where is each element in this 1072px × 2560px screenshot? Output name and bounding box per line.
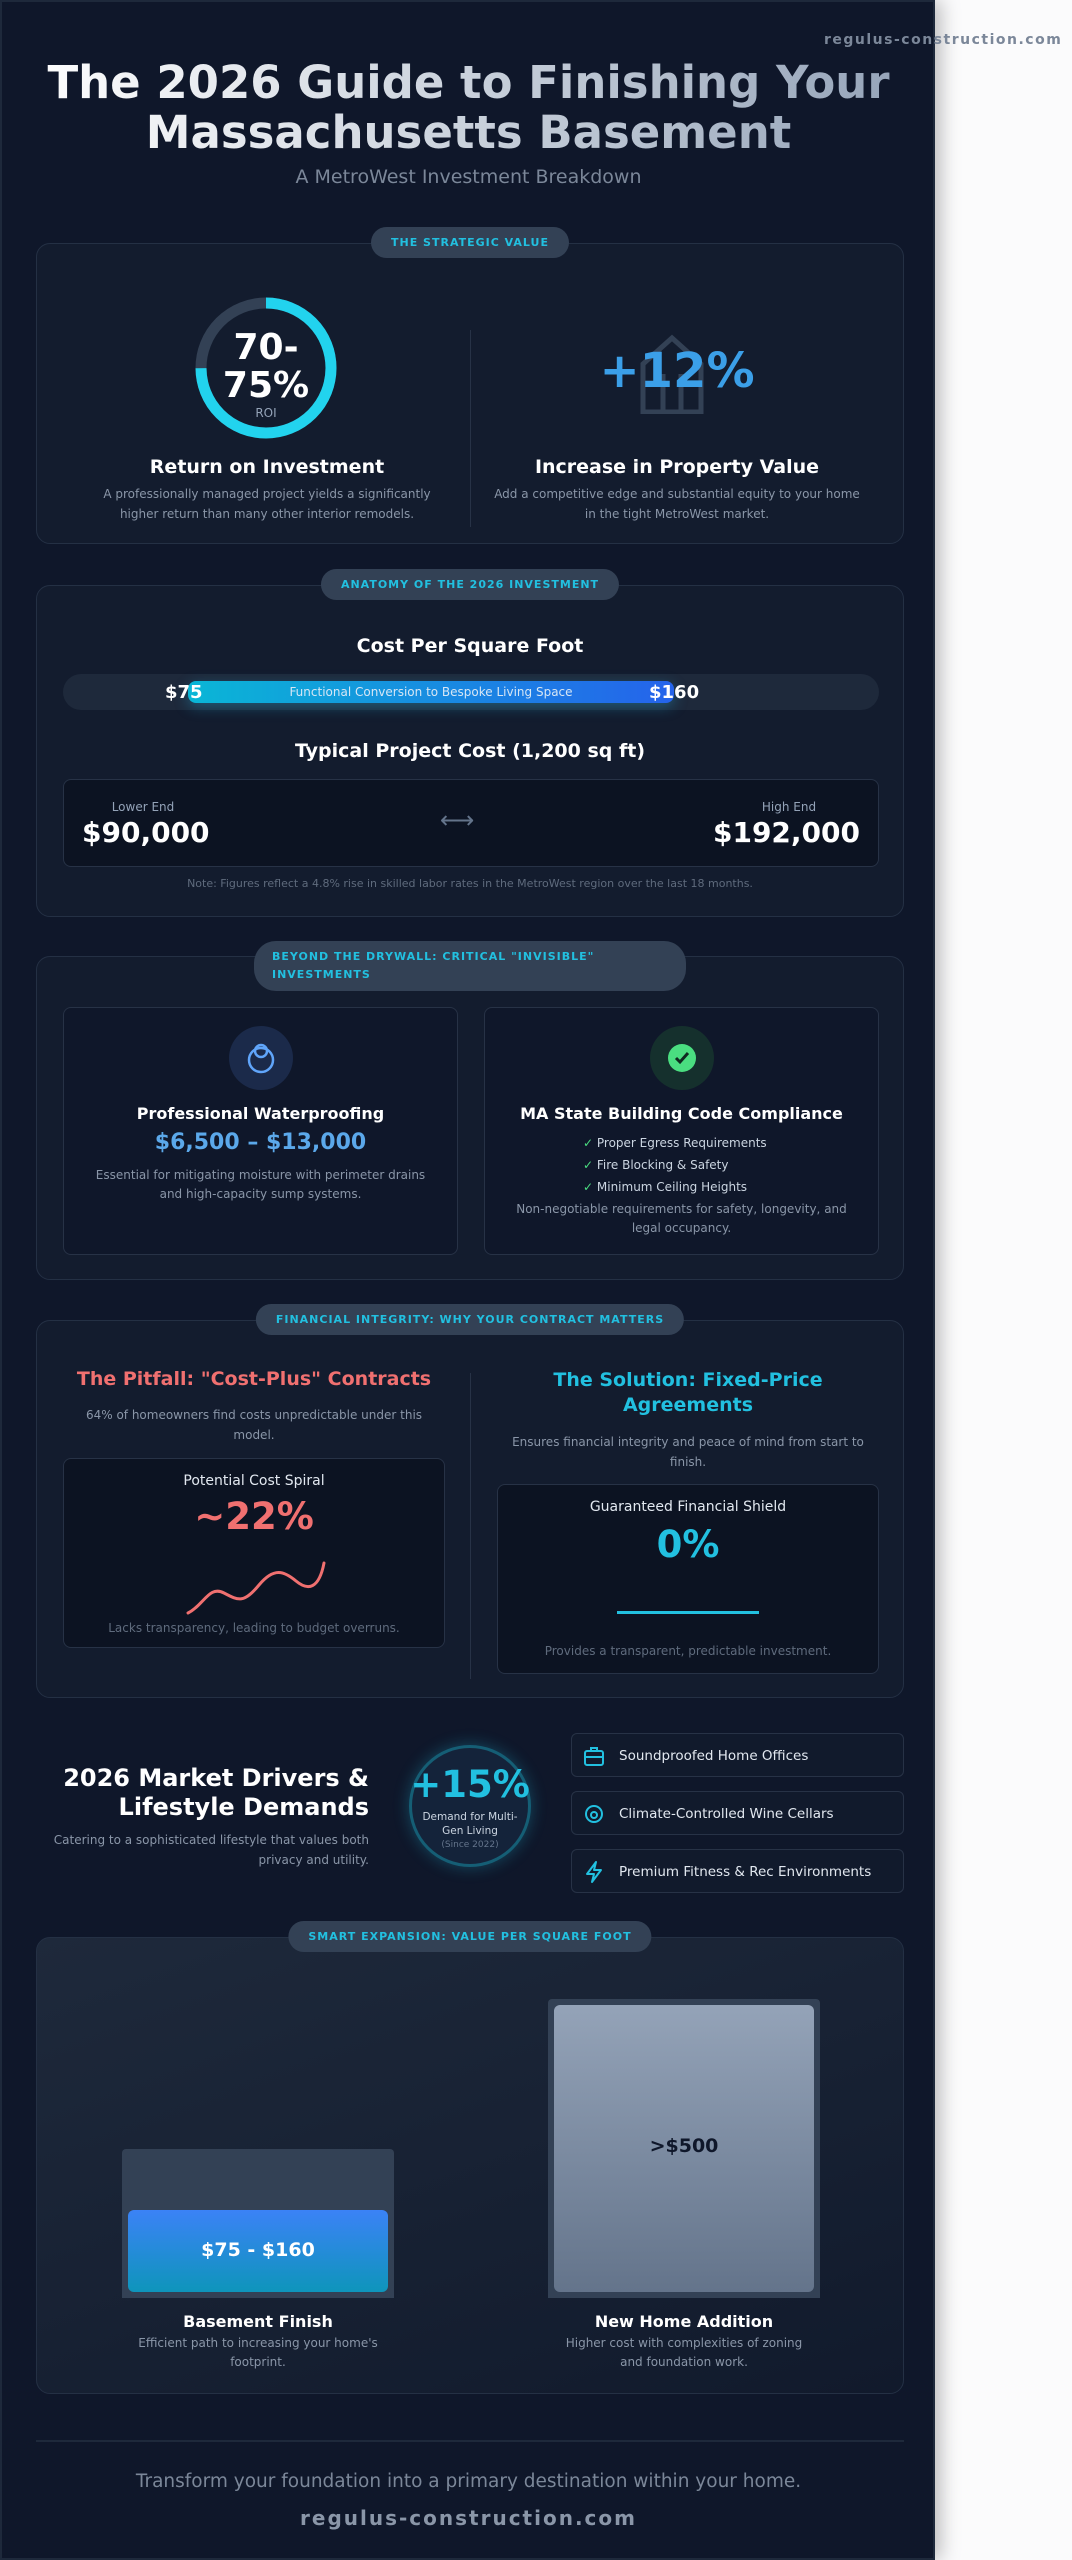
bar: basement finish: $75 - $160 <box>201 2239 315 2261</box>
shield box: 0% <box>657 1523 719 1566</box>
market drivers heading: Catering to a sophisticated lifestyle that values both <box>54 1833 369 1847</box>
pill: anatomy <box>321 569 619 600</box>
range bar: $75 <box>165 682 203 703</box>
card: waterproofing <box>63 1007 458 1255</box>
checklist: ✓ Minimum Ceiling Heights <box>583 1180 747 1194</box>
pill: beyond the drywall: BEYOND THE DRYWALL: CRITICAL "INVISIBLE" INVESTMENTS <box>272 950 594 981</box>
stat: +12% with house icon: +12% <box>599 343 755 399</box>
cost range box: $90,000 <box>82 816 210 849</box>
text: property value: in the tight MetroWest market. <box>585 507 769 521</box>
text: property value: Increase in Property Value <box>535 456 819 478</box>
card: code compliance: MA State Building Code Compliance <box>520 1104 843 1123</box>
pill: financial integrity: FINANCIAL INTEGRITY: WHY YOUR CONTRACT MATTERS <box>276 1313 664 1326</box>
card: code compliance: legal occupancy. <box>632 1221 731 1235</box>
stat circle: +15%: (Since 2022) <box>441 1840 499 1850</box>
item: home offices: Soundproofed Home Offices <box>619 1748 808 1764</box>
card: code compliance: Non-negotiable requirements for safety, longevity, and <box>516 1202 847 1216</box>
left: pitfall: 64% of homeowners find costs unpredictable under this <box>86 1408 422 1422</box>
stat circle: +15%: Demand for Multi- <box>422 1811 518 1823</box>
text: property value: Add a competitive edge and substantial equity to your home <box>494 487 860 501</box>
bar: new home addition <box>548 1999 820 2298</box>
label: new home addition: New Home Addition <box>595 2312 773 2331</box>
market drivers heading: privacy and utility. <box>259 1853 369 1867</box>
label: new home addition: and foundation work. <box>620 2355 748 2369</box>
left: pitfall <box>76 1368 431 1442</box>
cost range box: $192,000 <box>713 816 860 849</box>
shield box <box>497 1484 879 1674</box>
label: basement finish: footprint. <box>230 2355 286 2369</box>
pill: anatomy: ANATOMY OF THE 2026 INVESTMENT <box>341 578 599 591</box>
label: basement finish <box>138 2312 378 2369</box>
right: solution <box>512 1369 864 1469</box>
card: waterproofing: Essential for mitigating moisture with perimeter drains <box>96 1168 425 1182</box>
donut chart: ROI: 75% <box>223 365 309 406</box>
left: pitfall: The Pitfall: "Cost-Plus" Contracts <box>77 1368 431 1390</box>
right: solution: The Solution: Fixed-Price <box>553 1369 823 1391</box>
bar: basement finish <box>122 2149 394 2298</box>
subtitle: A MetroWest Investment Breakdown <box>295 166 642 188</box>
pill: strategic value <box>371 227 569 258</box>
icon: check <box>650 1026 714 1090</box>
item: home offices <box>571 1733 904 1777</box>
donut chart: ROI: 70- <box>233 327 299 368</box>
cost range box: High End <box>762 800 816 814</box>
stat circle: +15%: +15% <box>410 1763 530 1806</box>
card: waterproofing: $6,500 – $13,000 <box>155 1130 366 1155</box>
checklist: ✓ Proper Egress Requirements <box>583 1136 767 1150</box>
item: fitness: Premium Fitness & Rec Environments <box>619 1864 871 1880</box>
title: Massachusetts Basement <box>146 106 791 159</box>
label: new home addition: Higher cost with complexities of zoning <box>566 2336 802 2350</box>
pill: financial integrity <box>256 1304 684 1335</box>
left: pitfall: model. <box>233 1428 275 1442</box>
label: basement finish: Efficient path to increasing your home's <box>138 2336 378 2350</box>
label: basement finish: Basement Finish <box>183 2312 333 2331</box>
list: lifestyle items <box>571 1733 904 1893</box>
cost range box: ⟷ <box>440 806 474 834</box>
footer tagline: Transform your foundation into a primary destination within your home. <box>136 2471 801 2492</box>
market drivers heading: 2026 Market Drivers & <box>63 1764 369 1792</box>
card: waterproofing: and high-capacity sump systems. <box>160 1187 361 1201</box>
item: wine cellars <box>571 1791 904 1835</box>
title <box>22 58 915 158</box>
cost spiral box: ~22% <box>194 1495 314 1538</box>
right: solution: Agreements <box>623 1394 753 1416</box>
panel: anatomy <box>36 585 904 917</box>
label: new home addition <box>566 2312 802 2369</box>
market drivers heading: Lifestyle Demands <box>119 1793 369 1821</box>
panel: financial integrity <box>36 1320 904 1698</box>
shield box: Guaranteed Financial Shield <box>590 1499 786 1515</box>
shield box: Provides a transparent, predictable investment. <box>545 1644 831 1658</box>
bar: new home addition: >$500 <box>650 2135 718 2157</box>
checklist <box>583 1136 767 1194</box>
item: fitness <box>571 1849 904 1893</box>
checklist: ✓ Fire Blocking & Safety <box>583 1158 728 1172</box>
watermark: regulus-construction.com <box>824 32 1062 48</box>
heading: cost per sq ft: Cost Per Square Foot <box>357 635 583 657</box>
pill: strategic value: THE STRATEGIC VALUE <box>391 236 549 249</box>
text: property value <box>494 456 860 521</box>
market drivers heading <box>54 1764 369 1867</box>
icon: water drop <box>229 1026 293 1090</box>
note: Note: Figures reflect a 4.8% rise in skilled labor rates in the MetroWest region over the last 18 months. <box>187 877 753 890</box>
panel: smart expansion <box>36 1937 904 2394</box>
right: solution: finish. <box>670 1455 706 1469</box>
stat circle: +15% <box>409 1745 531 1867</box>
title: The 2026 Guide to Finishing Your <box>47 56 890 109</box>
squiggle line <box>186 1562 326 1615</box>
pill: smart expansion: SMART EXPANSION: VALUE PER SQUARE FOOT <box>308 1930 632 1943</box>
range bar <box>63 674 879 710</box>
card: waterproofing: Professional Waterproofing <box>137 1104 384 1123</box>
donut chart: ROI: ROI <box>255 406 277 420</box>
heading: typical project cost: Typical Project Cost (1,200 sq ft) <box>295 740 645 762</box>
panel: invisible investments <box>36 956 904 1280</box>
pill: smart expansion <box>288 1921 652 1952</box>
donut chart: ROI <box>196 298 336 438</box>
cost spiral box: Lacks transparency, leading to budget overruns. <box>108 1621 400 1635</box>
cost spiral box <box>63 1458 445 1648</box>
panel: strategic value <box>36 243 904 544</box>
card: code compliance <box>484 1007 879 1255</box>
right: solution: Ensures financial integrity and peace of mind from start to <box>512 1435 864 1449</box>
footer url: regulus-construction.com <box>300 2506 637 2530</box>
range bar: $160 <box>649 682 699 703</box>
cost spiral box: Potential Cost Spiral <box>183 1473 325 1489</box>
text: ROI: A professionally managed project yields a significantly <box>103 487 431 501</box>
text: ROI: higher return than many other interior remodels. <box>120 507 414 521</box>
range bar: Functional Conversion to Bespoke Living Space <box>289 685 573 699</box>
text: ROI <box>103 456 431 521</box>
pill: beyond the drywall <box>254 941 686 991</box>
text: ROI: Return on Investment <box>150 456 384 478</box>
item: wine cellars: Climate-Controlled Wine Cellars <box>619 1806 834 1822</box>
cost range box: Lower End <box>112 800 174 814</box>
cost range box <box>63 779 879 867</box>
stat circle: +15%: Gen Living <box>442 1825 498 1837</box>
